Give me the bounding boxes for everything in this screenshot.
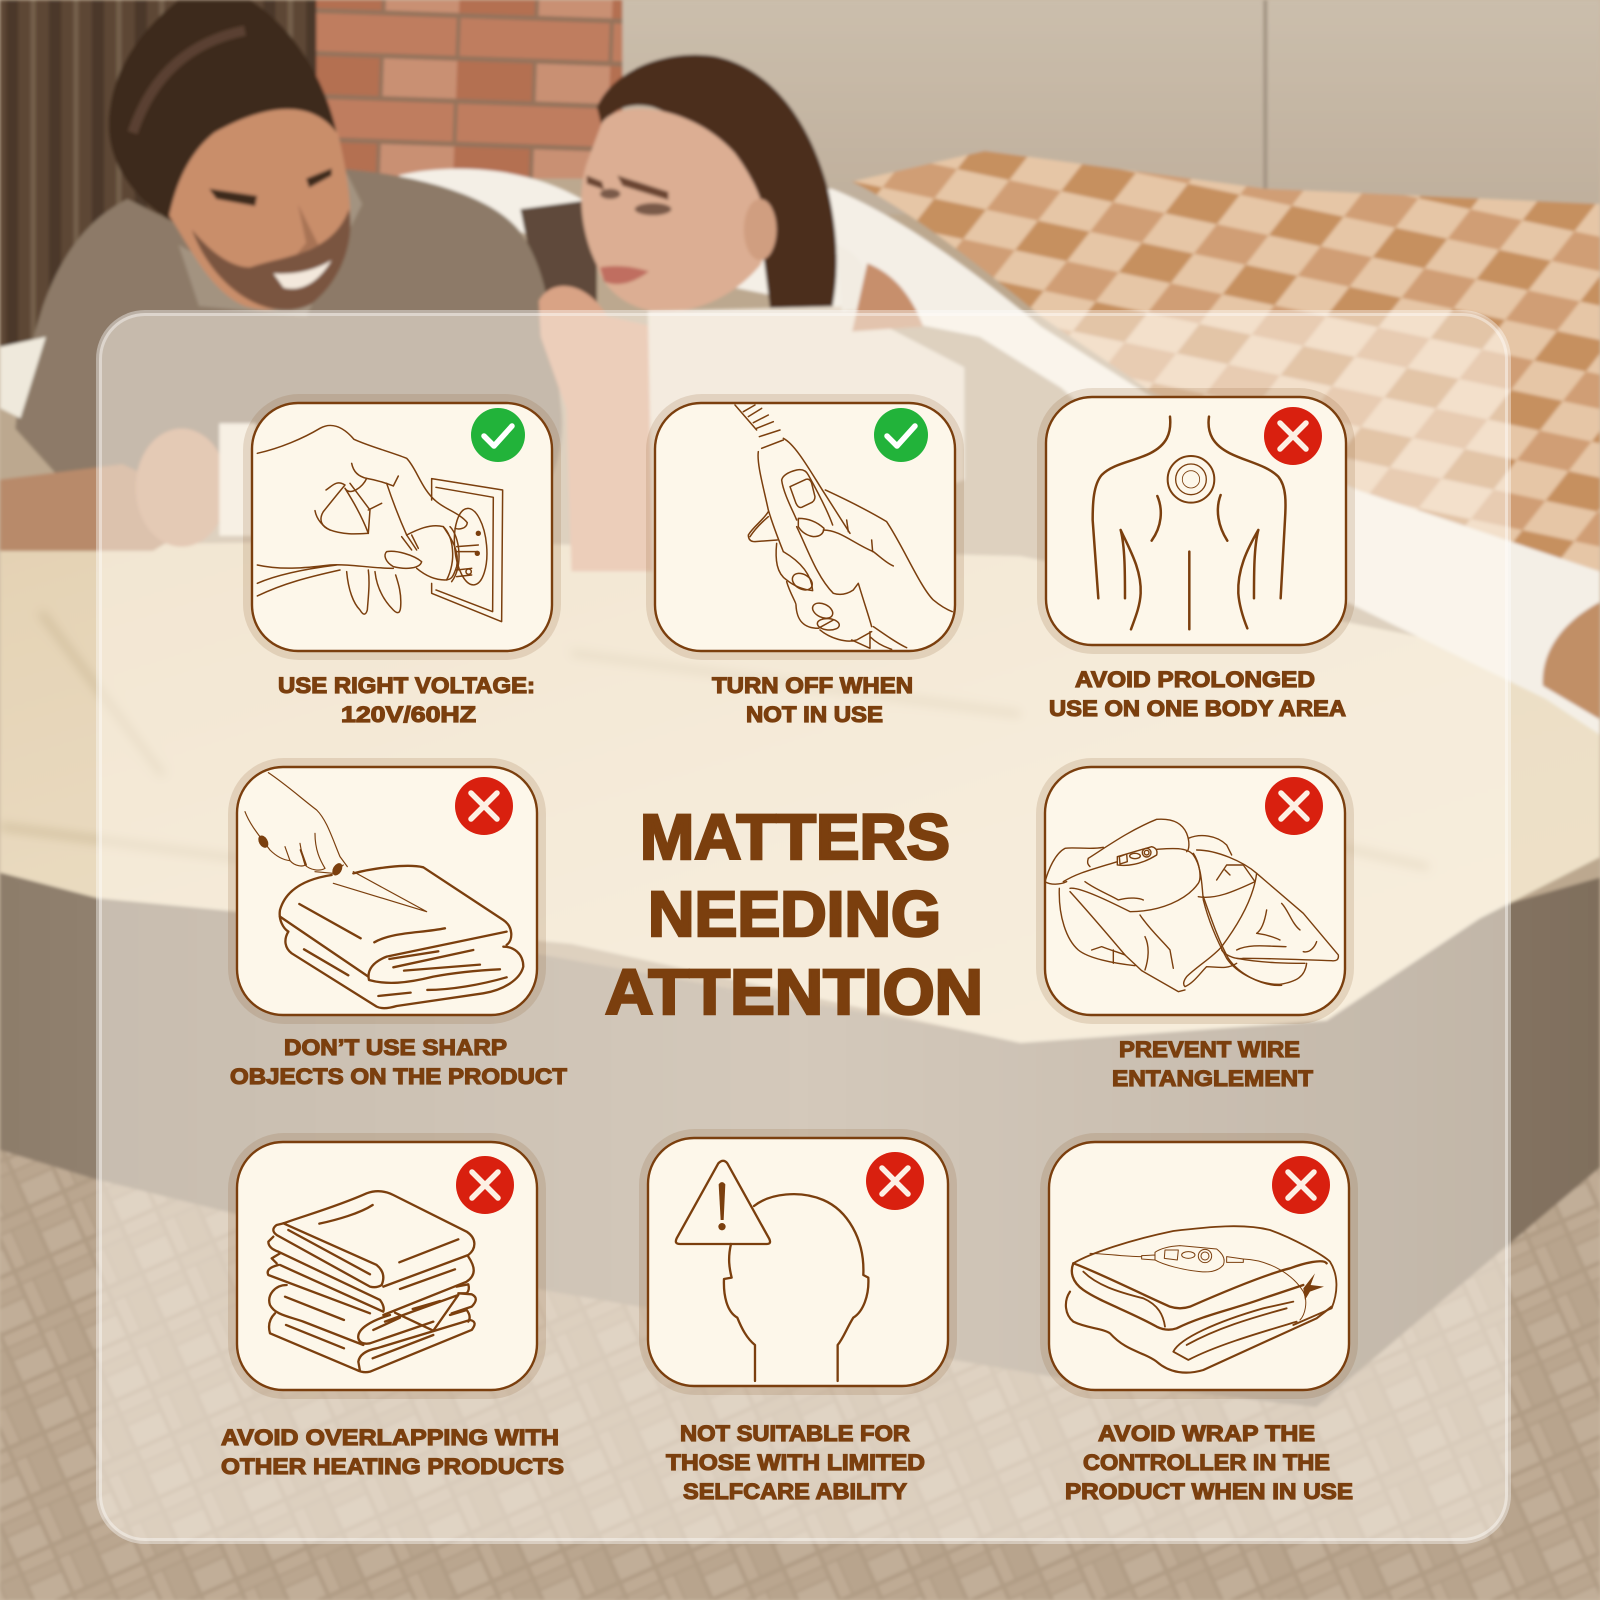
icon: hand holding controller (735, 405, 952, 649)
man eyes and nose (209, 168, 332, 255)
man arm and mug (0, 423, 256, 551)
sherpa blanket edge (398, 169, 1600, 735)
caption: THOSE WITH LIMITED (666, 1450, 925, 1475)
woman face (581, 109, 767, 312)
caption: 120V/60HZ (341, 702, 476, 727)
badge: red cross (1265, 777, 1323, 835)
item: avoid prolonged use (1037, 388, 1355, 721)
caption: NOT SUITABLE FOR (680, 1421, 910, 1446)
badge: red cross (456, 1156, 514, 1214)
item: no sharp objects (228, 758, 568, 1089)
caption: PREVENT WIRE (1119, 1037, 1300, 1062)
caption: TURN OFF WHEN (712, 673, 913, 698)
caption: OBJECTS ON THE PRODUCT (230, 1064, 568, 1089)
checker blanket (852, 151, 1600, 719)
badge: red cross (1272, 1156, 1330, 1214)
caption (1065, 1421, 1353, 1504)
carpet (0, 1122, 1600, 1600)
icon: knife and folded blanket (245, 773, 523, 1008)
caption (230, 1035, 568, 1089)
item: turn off when not in use (646, 394, 964, 727)
icon: hand plugging into socket (257, 425, 503, 622)
caption: NOT IN USE (746, 702, 883, 727)
man shirt (15, 168, 562, 531)
woman hair (597, 55, 837, 311)
caption (221, 1425, 564, 1479)
caption: OTHER HEATING PRODUCTS (221, 1454, 564, 1479)
badge: red cross (455, 777, 513, 835)
icon: head with warning triangle (676, 1161, 868, 1381)
title: matters needing attention: MATTERS (640, 801, 950, 873)
man hair (109, 0, 337, 219)
caption: PRODUCT WHEN IN USE (1065, 1479, 1353, 1504)
caption (1112, 1037, 1314, 1091)
woman hand and arm (539, 286, 653, 571)
badge: red cross (1264, 407, 1322, 465)
item: not suitable for limited selfcare (639, 1129, 957, 1504)
wood wall (0, 0, 327, 357)
badge: red cross (866, 1152, 924, 1210)
caption (712, 673, 913, 727)
caption: USE RIGHT VOLTAGE: (278, 673, 535, 698)
sheet (0, 541, 1600, 1043)
icon: tangled blanket and wire (1045, 819, 1338, 992)
caption: SELFCARE ABILITY (683, 1479, 907, 1504)
man beard and smile (192, 209, 350, 310)
caption: CONTROLLER IN THE (1083, 1450, 1330, 1475)
man face (158, 97, 350, 310)
headboard (622, 0, 1600, 214)
item: prevent wire entanglement (1036, 758, 1354, 1091)
brick wall (316, 0, 624, 179)
icon: back with heat rings (1093, 417, 1286, 629)
item: avoid wrapping controller (1040, 1133, 1358, 1504)
caption: ENTANGLEMENT (1112, 1066, 1314, 1091)
bed base (0, 857, 1600, 1407)
icon: stack of blankets (268, 1191, 476, 1372)
shadow between couple (520, 199, 597, 311)
caption (1049, 667, 1346, 721)
title: matters needing attention: NEEDING (648, 878, 941, 950)
caption (278, 673, 535, 727)
woman features (587, 176, 777, 284)
sheet creases (0, 612, 1429, 898)
caption: USE ON ONE BODY AREA (1049, 696, 1346, 721)
item: avoid overlapping (221, 1133, 564, 1479)
caption: AVOID PROLONGED (1075, 667, 1315, 692)
translucent panel (99, 313, 1508, 1541)
title: matters needing attention: ATTENTION (605, 956, 983, 1028)
caption: AVOID WRAP THE (1098, 1421, 1315, 1446)
badge: green check (874, 408, 928, 462)
icon: folded blanket with controller (1066, 1226, 1336, 1373)
caption: AVOID OVERLAPPING WITH (221, 1425, 559, 1450)
item: use right voltage (243, 394, 561, 727)
woman top and shoulder (648, 245, 964, 571)
caption (666, 1421, 925, 1504)
panel area left sherpa (0, 337, 46, 418)
caption: DON’T USE SHARP (284, 1035, 507, 1060)
title: matters needing attention (605, 801, 983, 1028)
badge: green check (471, 408, 525, 462)
